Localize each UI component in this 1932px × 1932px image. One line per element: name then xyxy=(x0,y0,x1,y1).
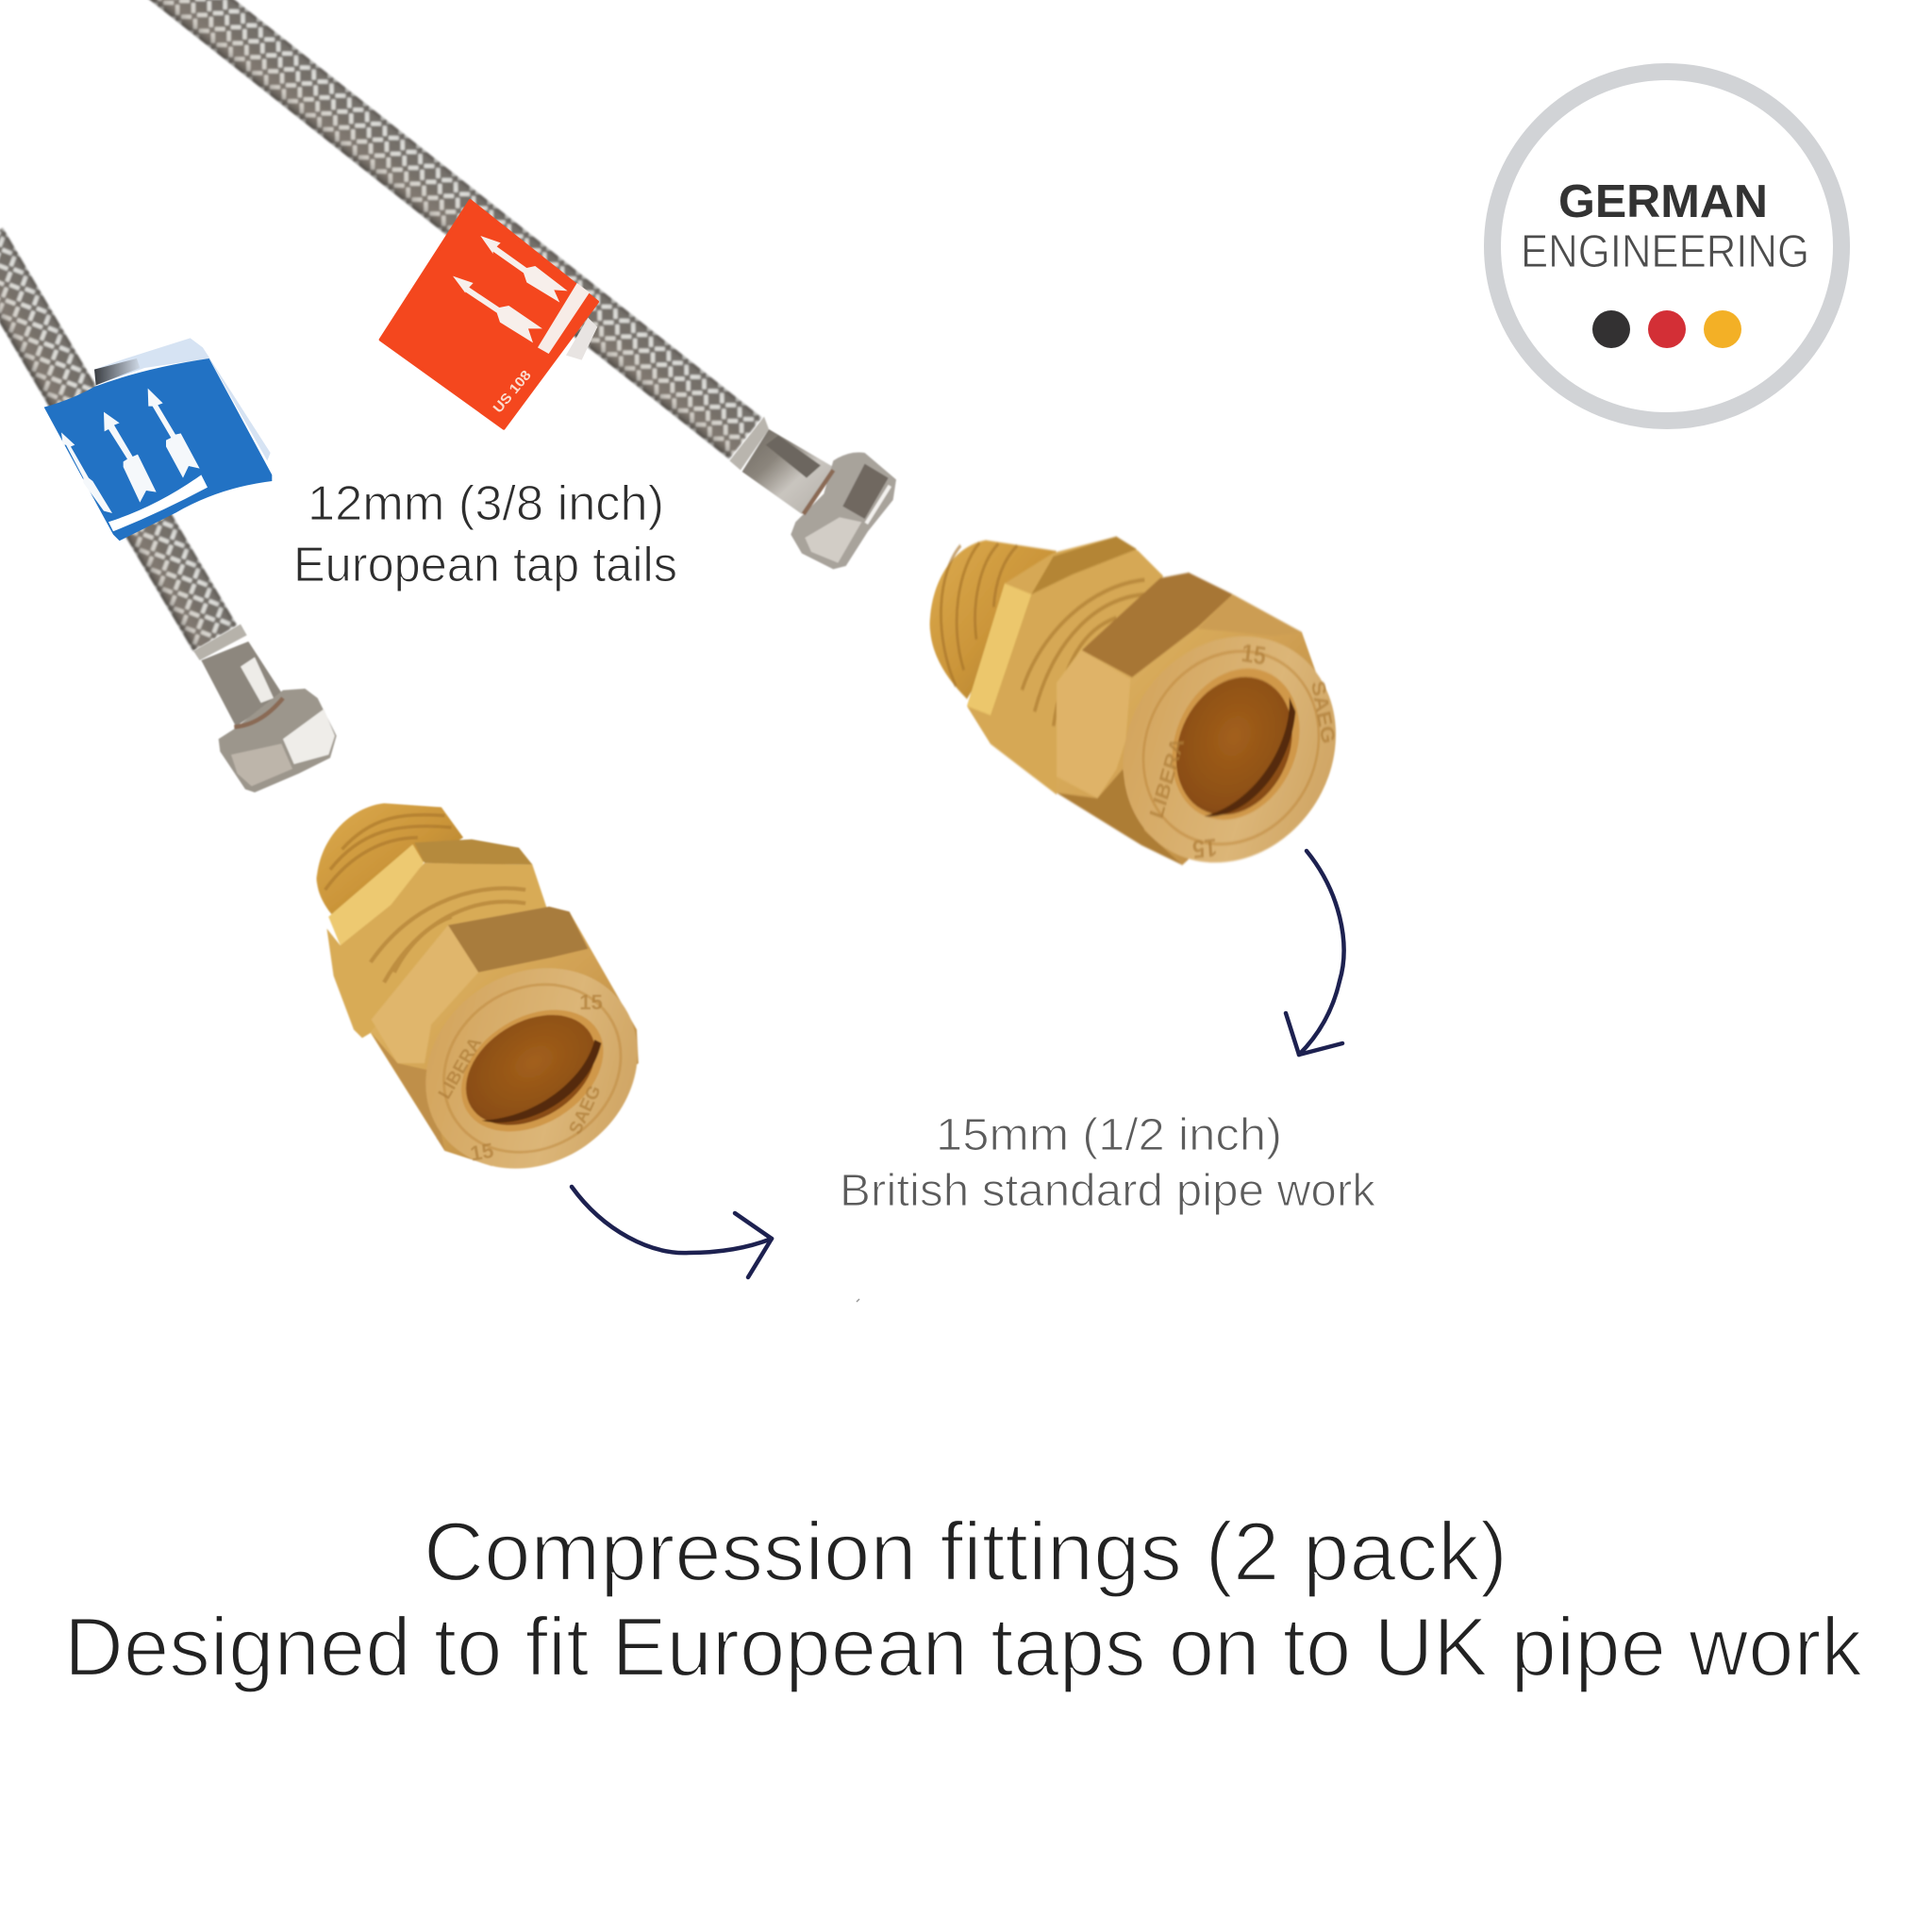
embossed markings: SAEG xyxy=(1307,678,1340,746)
braided hose upper xyxy=(146,0,762,459)
rear hex top face xyxy=(1031,537,1137,594)
nut upper right face xyxy=(1198,594,1302,636)
embossed markings: 15 xyxy=(579,991,603,1014)
rear body xyxy=(967,537,1163,794)
embossed markings: LIBERA xyxy=(435,1034,486,1103)
label: 12mm tap tails: 12mm (3/8 inch) xyxy=(308,476,664,531)
rear hex top face xyxy=(414,840,532,864)
chrome ferrule and nut lower xyxy=(193,625,337,792)
embossed markings: 15 xyxy=(469,1139,495,1166)
badge: German Engineering xyxy=(1492,72,1841,421)
nut barrel xyxy=(371,907,639,1166)
brass fitting: upper right xyxy=(930,537,1372,907)
neck ridges xyxy=(371,889,525,982)
embossed markings: 15 xyxy=(1240,640,1268,671)
arrow: right curved xyxy=(1286,851,1344,1055)
title: Designed to fit European taps on to UK pipe work xyxy=(64,1600,1863,1693)
label: 15mm pipe work xyxy=(840,1110,1376,1216)
nut top face xyxy=(1082,573,1233,677)
title: Compression fittings (2 pack) xyxy=(424,1505,1507,1598)
end face xyxy=(1087,592,1372,907)
male thread xyxy=(317,803,463,917)
label: 12mm tap tails: European tap tails xyxy=(293,538,677,592)
brass fitting: lower left xyxy=(317,803,676,1209)
tap tail: upper right hose xyxy=(146,0,896,569)
end face xyxy=(387,927,676,1209)
label: 12mm tap tails xyxy=(293,476,677,592)
rear body xyxy=(326,863,549,1038)
nut barrel xyxy=(1057,573,1335,865)
red label: US 108 xyxy=(491,368,535,416)
nut lower shade xyxy=(372,1033,444,1151)
badge word ENGINEERING: ENGINEERING xyxy=(1521,226,1809,277)
speck xyxy=(857,1299,859,1302)
blue label xyxy=(44,338,272,541)
embossed markings: SAEG xyxy=(566,1083,606,1138)
neck ridges xyxy=(1022,580,1148,726)
nut top face xyxy=(448,907,588,973)
tap tail: lower left hose xyxy=(0,227,337,792)
label: 15mm pipe work: British standard pipe work xyxy=(840,1166,1376,1216)
bore xyxy=(439,985,625,1157)
rear hex front face xyxy=(328,844,424,945)
badge ring xyxy=(1492,72,1841,421)
red label xyxy=(380,201,597,428)
label: 15mm pipe work: 15mm (1/2 inch) xyxy=(936,1110,1282,1160)
nut lower shade xyxy=(1057,770,1182,865)
rear hex front face xyxy=(967,583,1031,715)
nut front face xyxy=(1057,650,1130,798)
title xyxy=(64,1505,1863,1693)
bore xyxy=(1146,639,1325,849)
braided hose lower xyxy=(0,227,237,651)
male thread xyxy=(930,541,1057,699)
nut front face xyxy=(372,925,478,1063)
embossed markings: 15 xyxy=(1191,833,1218,863)
badge word GERMAN: GERMAN xyxy=(1558,176,1768,227)
embossed markings xyxy=(1145,640,1340,863)
arrow: bottom curved xyxy=(572,1187,772,1277)
embossed markings: LIBERA xyxy=(1145,735,1189,822)
badge dots xyxy=(1592,310,1741,348)
embossed markings xyxy=(435,991,606,1166)
chrome ferrule and nut upper xyxy=(729,417,896,569)
